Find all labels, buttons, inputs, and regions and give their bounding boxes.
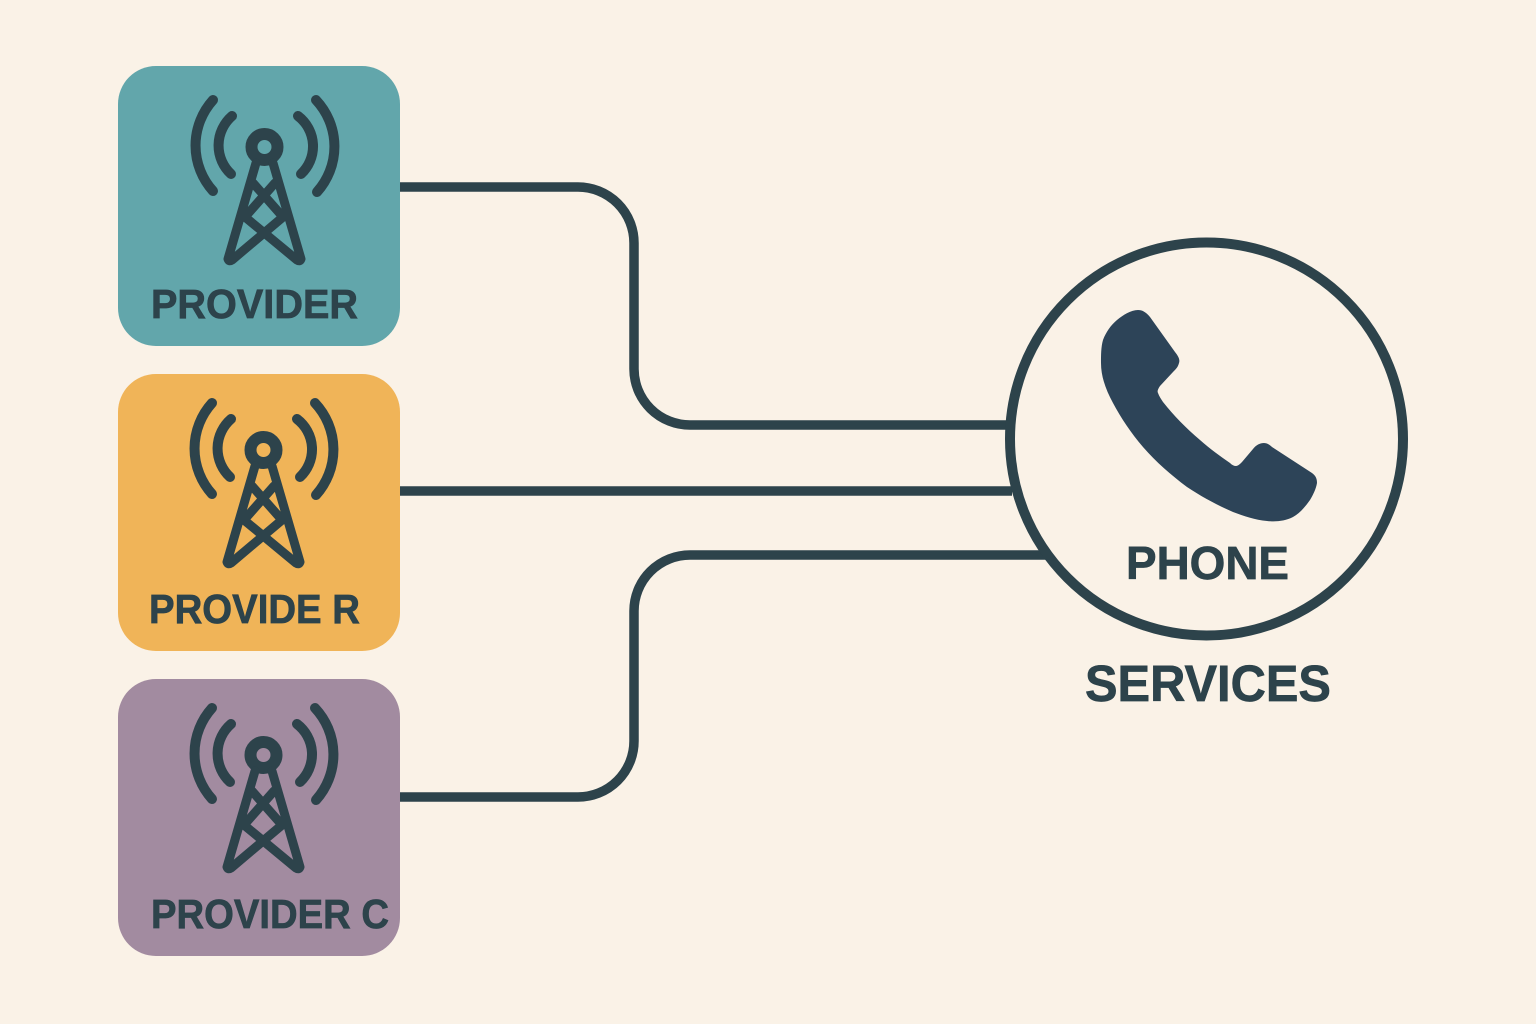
- connector: provider B to phone circle: [400, 486, 1012, 496]
- panel background: purple: [118, 679, 400, 956]
- icon: telephone handset: [1101, 310, 1317, 521]
- connector: provider C to phone circle: [400, 555, 1046, 797]
- label: PROVIDER C: PROVIDER C: [151, 891, 389, 937]
- icon: signal tower: [196, 100, 334, 261]
- phone circle: [1010, 242, 1403, 636]
- panel: phone services: [1010, 242, 1403, 712]
- panel: provider B: [118, 374, 400, 651]
- panel background: teal: [118, 66, 400, 346]
- label: PHONE: PHONE: [1126, 537, 1289, 589]
- label: SERVICES: SERVICES: [1085, 655, 1331, 712]
- connector: provider A to phone circle: [400, 187, 1006, 425]
- panel: provider A: [118, 66, 400, 346]
- icon: signal tower: [195, 403, 333, 564]
- icon: signal tower: [195, 708, 333, 869]
- panel: provider C: [118, 679, 400, 956]
- panel background: orange: [118, 374, 400, 651]
- label: PROVIDER: PROVIDER: [151, 281, 358, 327]
- label: PROVIDE R: PROVIDE R: [149, 586, 360, 632]
